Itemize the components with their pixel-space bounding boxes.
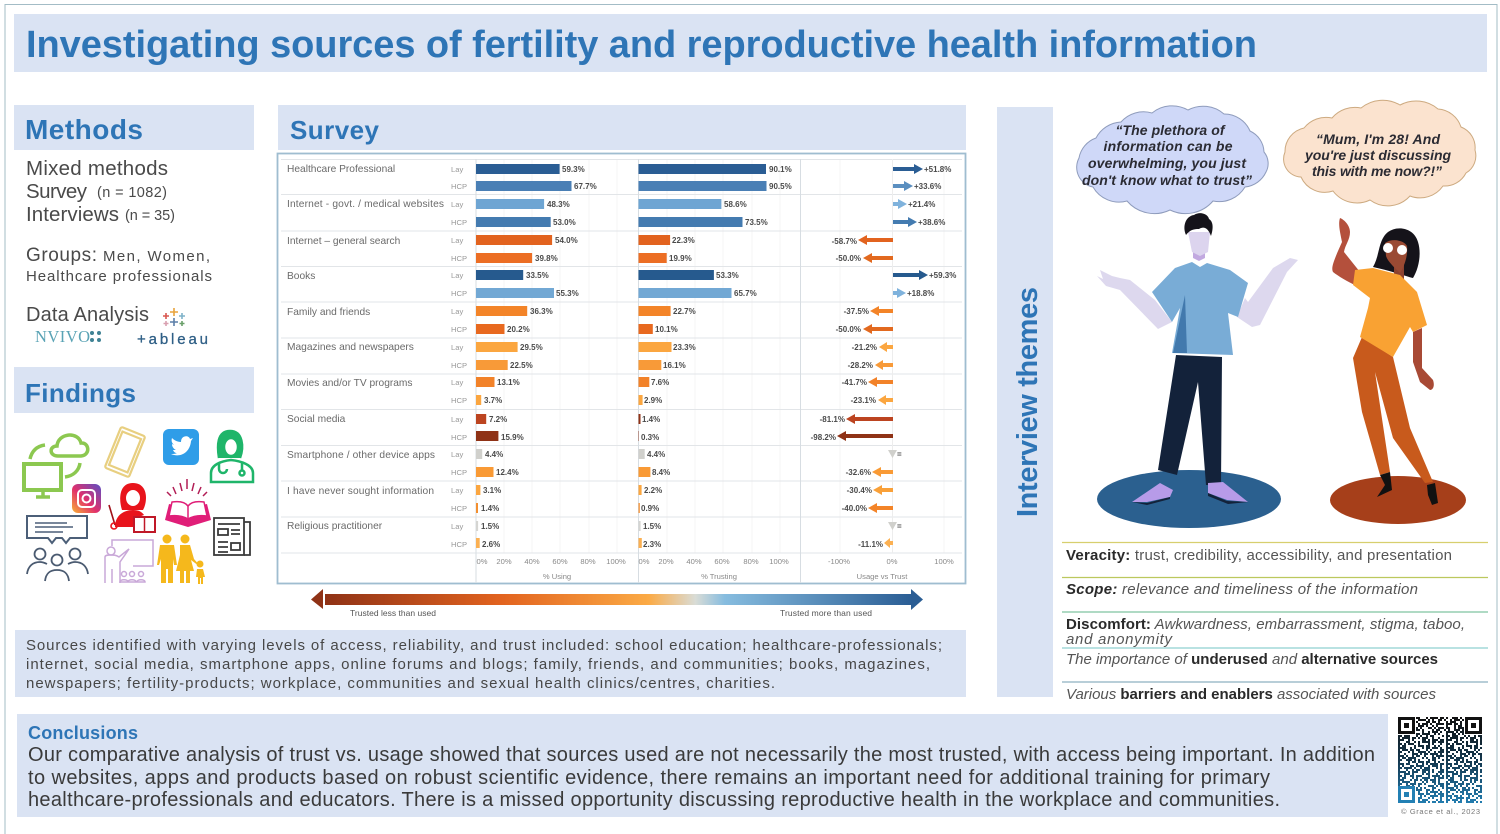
theme: discomfort: Discomfort: Awkwardness, embarrassment, stigma, taboo,: [1066, 616, 1465, 633]
values: usage vs trust: [811, 165, 956, 549]
text block: sources summary: [15, 630, 966, 697]
Lay and HCP labels: HCP: [451, 433, 467, 442]
panel: methods text: Mixed methods: [26, 157, 168, 180]
values: % using: 29.5%: [520, 343, 543, 352]
row labels: Religious practitioner: [287, 521, 383, 532]
values: usage vs trust: -11.1%: [858, 540, 883, 549]
values: % using: 2.6%: [482, 540, 500, 549]
panel: methods text: Interviews: [26, 203, 119, 226]
icon: family: [157, 534, 205, 584]
shoes: [1377, 472, 1392, 497]
neck and face: [1193, 250, 1205, 261]
values: % trusting: 65.7%: [734, 289, 757, 298]
panel: methods text: Healthcare professionals: [26, 268, 212, 285]
illustration: woman with speech cloud: [1284, 100, 1476, 524]
row labels: Healthcare Professional: [287, 164, 395, 175]
title: [14, 14, 1487, 72]
axes: -100%: [828, 557, 850, 566]
values: % using: 3.1%: [483, 486, 501, 495]
arrow: trust gradient legend: Trusted more than used: [780, 608, 872, 618]
values: % using: 39.8%: [535, 254, 558, 263]
values: usage vs trust: -40.0%: [842, 504, 867, 513]
trousers: [1158, 355, 1222, 485]
cloud quote: discussing: [1284, 100, 1476, 206]
icon: teacher with book: [109, 483, 155, 532]
axes: 0%: [477, 557, 488, 566]
icon: open book: [165, 479, 211, 527]
values: % trusting: 19.9%: [669, 254, 692, 263]
axes: % Trusting: [701, 572, 737, 581]
theme: discomfort: and anonymity: [1066, 631, 1174, 648]
Lay and HCP labels: HCP: [451, 361, 467, 370]
glasses: [1383, 243, 1393, 253]
values: usage vs trust: -41.7%: [842, 378, 867, 387]
values: % using: 54.0%: [555, 236, 578, 245]
icon: newspaper: [214, 518, 250, 555]
heading: Interview themes: [997, 107, 1053, 697]
values: % using: 36.3%: [530, 307, 553, 316]
text block: sources summary: internet, social media, smartphone apps, online forums and blogs; family, friends, and communities; books, magazines,: [26, 656, 930, 673]
axes: 40%: [524, 557, 540, 566]
Lay and HCP labels: Lay: [451, 343, 463, 352]
Lay and HCP labels: Lay: [451, 236, 463, 245]
heading: Findings: Findings: [25, 378, 136, 408]
values: usage vs trust: +33.6%: [914, 182, 941, 191]
values: usage vs trust: =: [897, 450, 902, 459]
axes: % Using: [543, 572, 571, 581]
values: % trusting: 73.5%: [745, 218, 768, 227]
values: % trusting: 4.4%: [647, 450, 665, 459]
values: % trusting: 0.9%: [641, 504, 659, 513]
shirt: [1152, 262, 1248, 355]
Lay and HCP labels: Lay: [451, 200, 463, 209]
values: % using: 33.5%: [526, 271, 549, 280]
values: % trusting: 90.1%: [769, 165, 792, 174]
Lay and HCP labels: HCP: [451, 218, 467, 227]
axes: 60%: [714, 557, 730, 566]
values: usage vs trust: -21.2%: [852, 343, 877, 352]
values: % trusting: 0.3%: [641, 433, 659, 442]
Lay and HCP labels: Lay: [451, 522, 463, 531]
row labels: [287, 164, 444, 532]
panel: methods text: Men, Women,: [103, 248, 210, 265]
Lay and HCP labels: HCP: [451, 396, 467, 405]
values: % using: [481, 165, 597, 549]
logo: tableau: +ableau: [137, 331, 208, 348]
values: usage vs trust: -30.4%: [847, 486, 872, 495]
row labels: Books: [287, 271, 315, 282]
axes: 100%: [769, 557, 789, 566]
cloud quote: overwhelming: information can be: [1104, 138, 1233, 154]
values: % using: 7.2%: [489, 415, 507, 424]
values: usage vs trust: +18.8%: [907, 289, 934, 298]
row labels: Social media: [287, 414, 346, 425]
shirt: [1353, 268, 1427, 357]
axes: 100%: [934, 557, 954, 566]
icon: instagram: [72, 484, 101, 513]
values: % using: 55.3%: [556, 289, 579, 298]
Lay and HCP labels: HCP: [451, 504, 467, 513]
values: % trusting: 2.9%: [644, 396, 662, 405]
theme: discomfort: [1066, 616, 1465, 648]
Lay and HCP labels: Lay: [451, 450, 463, 459]
values: % trusting: 2.2%: [644, 486, 662, 495]
values: usage vs trust: =: [897, 522, 902, 531]
cloud quote: overwhelming: don't know what to trust”: [1082, 172, 1252, 188]
panel: source icons: [24, 427, 253, 584]
icon: smartphone: [105, 427, 145, 477]
values: usage vs trust: -28.2%: [848, 361, 873, 370]
icon: group of people: [27, 548, 88, 581]
Lay and HCP labels: Lay: [451, 486, 463, 495]
Lay and HCP labels: [451, 165, 467, 549]
shoes: [1132, 483, 1173, 502]
values: % using: 59.3%: [562, 165, 585, 174]
values: % trusting: 7.6%: [651, 378, 669, 387]
panel: methods text: Data Analysis: [26, 304, 149, 326]
arrows: usage vs trust: [837, 164, 928, 548]
values: usage vs trust: -50.0%: [836, 325, 861, 334]
panel: conclusions: to websites, apps and products based on robust scientific evidence, there remains an important need for additional training for primary: [28, 767, 1270, 789]
panel: conclusions: healthcare-professionals and educators. There is a missed opportunity discussing reproductive health in the workplace and communities.: [28, 789, 1280, 811]
values: usage vs trust: +38.6%: [918, 218, 945, 227]
values: % using: 1.4%: [481, 504, 499, 513]
values: usage vs trust: -37.5%: [844, 307, 869, 316]
panel: methods text: Survey: [26, 180, 88, 203]
axes: 0%: [887, 557, 898, 566]
icon: monitor and cloud: [24, 435, 88, 497]
icon: speech bubble: [27, 516, 87, 543]
values: % trusting: 22.3%: [672, 236, 695, 245]
values: % using: 3.7%: [484, 396, 502, 405]
values: % trusting: 53.3%: [716, 271, 739, 280]
Lay and HCP labels: HCP: [451, 289, 467, 298]
heading: Survey: [278, 105, 966, 150]
values: % using: 20.2%: [507, 325, 530, 334]
values: usage vs trust: -50.0%: [836, 254, 861, 263]
icon: twitter: [163, 429, 199, 465]
text block: sources summary: Sources identified with varying levels of access, reliability, and trust included: school education; healthcare-professionals;: [26, 637, 942, 654]
values: % using: 4.4%: [485, 450, 503, 459]
panel: methods text: (n = 1082): [97, 185, 167, 201]
cloud quote: overwhelming: overwhelming, you just: [1088, 155, 1247, 171]
theme: barriers: Various barriers and enablers associated with sources: [1066, 686, 1436, 703]
icon: presenter: [105, 540, 153, 583]
Lay and HCP labels: HCP: [451, 468, 467, 477]
values: % using: 13.1%: [497, 378, 520, 387]
cloud quote: discussing: you're just discussing: [1304, 147, 1451, 163]
Lay and HCP labels: Lay: [451, 307, 463, 316]
QR code: [1398, 717, 1482, 804]
hair: [1184, 213, 1213, 236]
trousers: [1353, 337, 1433, 483]
values: % trusting: 1.4%: [642, 415, 660, 424]
icon: tableau mark: [163, 308, 185, 326]
theme: veracity: Veracity: trust, credibility, accessibility, and presentation: [1066, 547, 1452, 564]
bars: % using: [476, 164, 572, 548]
cloud quote: discussing: “Mum, I'm 28! And: [1316, 131, 1440, 147]
values: usage vs trust: +59.3%: [929, 271, 956, 280]
panel: conclusions: Our comparative analysis of trust vs. usage showed that sources used are not necessarily the most trusted, with access being important. In addition: [28, 744, 1375, 766]
Lay and HCP labels: HCP: [451, 254, 467, 263]
illustration: man with speech cloud: [1077, 106, 1298, 528]
values: usage vs trust: -32.6%: [846, 468, 871, 477]
row labels: Smartphone / other device apps: [287, 450, 435, 461]
cloud quote: overwhelming: “The plethora of: [1116, 122, 1226, 138]
arrow: trust gradient legend: Trusted less than used: [350, 608, 436, 618]
values: % using: 15.9%: [501, 433, 524, 442]
arrow: trust gradient legend: [311, 589, 923, 618]
axes: 60%: [552, 557, 568, 566]
values: % using: 12.4%: [496, 468, 519, 477]
heading: Methods: [14, 105, 254, 150]
values: % trusting: 58.6%: [724, 200, 747, 209]
theme: scope: Scope: relevance and timeliness of the information: [1066, 581, 1418, 598]
text block: sources summary: newspapers; fertility-products; workplace, communities and sexual health clinics/centres, charities.: [26, 675, 775, 692]
lower arm: [1413, 328, 1434, 390]
chart: usage vs trust by source: [278, 154, 966, 584]
axes: 40%: [686, 557, 702, 566]
Lay and HCP labels: Lay: [451, 271, 463, 280]
panel: methods text: Groups:: [26, 245, 97, 266]
values: % using: 53.0%: [553, 218, 576, 227]
values: % trusting: [641, 165, 792, 549]
panel: methods text: (n = 35): [125, 208, 175, 224]
heading: Methods: Methods: [25, 114, 143, 145]
credit: © Grace et al., 2023: [1401, 807, 1480, 816]
panel: conclusions: [17, 714, 1388, 817]
panel: interview themes list: [1062, 542, 1488, 703]
values: % using: 22.5%: [510, 361, 533, 370]
platform: [1330, 476, 1466, 524]
values: usage vs trust: +51.8%: [924, 165, 951, 174]
heading: Interview themes: Interview themes: [1012, 287, 1044, 517]
values: % trusting: 10.1%: [655, 325, 678, 334]
heading: Findings: [14, 367, 254, 413]
row labels: Magazines and newspapers: [287, 342, 414, 353]
row labels: Family and friends: [287, 307, 370, 318]
neck: [1394, 262, 1404, 280]
values: % trusting: 8.4%: [652, 468, 670, 477]
face: [1385, 240, 1407, 273]
Lay and HCP labels: Lay: [451, 415, 463, 424]
values: usage vs trust: +21.4%: [908, 200, 935, 209]
logo: NVivo: NVIVO: [35, 327, 90, 346]
axes: [477, 557, 954, 581]
values: usage vs trust: -23.1%: [851, 396, 876, 405]
values: usage vs trust: -98.2%: [811, 433, 836, 442]
row labels: Internet - govt. / medical websites: [287, 199, 444, 210]
icon: doctor: [211, 431, 253, 482]
values: usage vs trust: -81.1%: [820, 415, 845, 424]
row labels: I have never sought information: [287, 486, 434, 497]
arms: [1097, 270, 1172, 329]
bars: % trusting: [638, 164, 766, 548]
values: % trusting: 1.5%: [643, 522, 661, 531]
axes: 80%: [580, 557, 596, 566]
row labels: Internet – general search: [287, 236, 400, 247]
axes: 80%: [743, 557, 759, 566]
values: % using: 48.3%: [547, 200, 570, 209]
title: Investigating sources of fertility and reproductive health information: [26, 24, 1257, 66]
axes: 0%: [639, 557, 650, 566]
Lay and HCP labels: HCP: [451, 540, 467, 549]
hair: [1373, 228, 1420, 278]
platform: [1097, 470, 1281, 528]
theme: alternative sources: The importance of underused and alternative sources: [1066, 651, 1438, 668]
Lay and HCP labels: Lay: [451, 378, 463, 387]
row labels: Movies and/or TV programs: [287, 378, 413, 389]
axes: 100%: [606, 557, 626, 566]
values: % trusting: 23.3%: [673, 343, 696, 352]
axes: Usage vs Trust: [857, 572, 908, 581]
values: % trusting: 2.3%: [643, 540, 661, 549]
Lay and HCP labels: Lay: [451, 165, 463, 174]
panel: methods text: [26, 157, 212, 348]
heading: Survey: Survey: [290, 115, 380, 145]
raised arm: [1332, 218, 1360, 285]
cloud quote: discussing: this with me now?!”: [1312, 163, 1442, 179]
values: % using: 1.5%: [481, 522, 499, 531]
Lay and HCP labels: HCP: [451, 182, 467, 191]
cloud quote: overwhelming: [1077, 106, 1268, 214]
values: % trusting: 22.7%: [673, 307, 696, 316]
values: usage vs trust: -58.7%: [832, 237, 857, 246]
grid lines: [504, 159, 944, 553]
axes: 20%: [658, 557, 674, 566]
panel: conclusions: Conclusions: [28, 723, 138, 743]
axes: 20%: [496, 557, 512, 566]
values: % trusting: 16.1%: [663, 361, 686, 370]
Lay and HCP labels: HCP: [451, 325, 467, 334]
values: % trusting: 90.5%: [769, 182, 792, 191]
values: % using: 67.7%: [574, 182, 597, 191]
